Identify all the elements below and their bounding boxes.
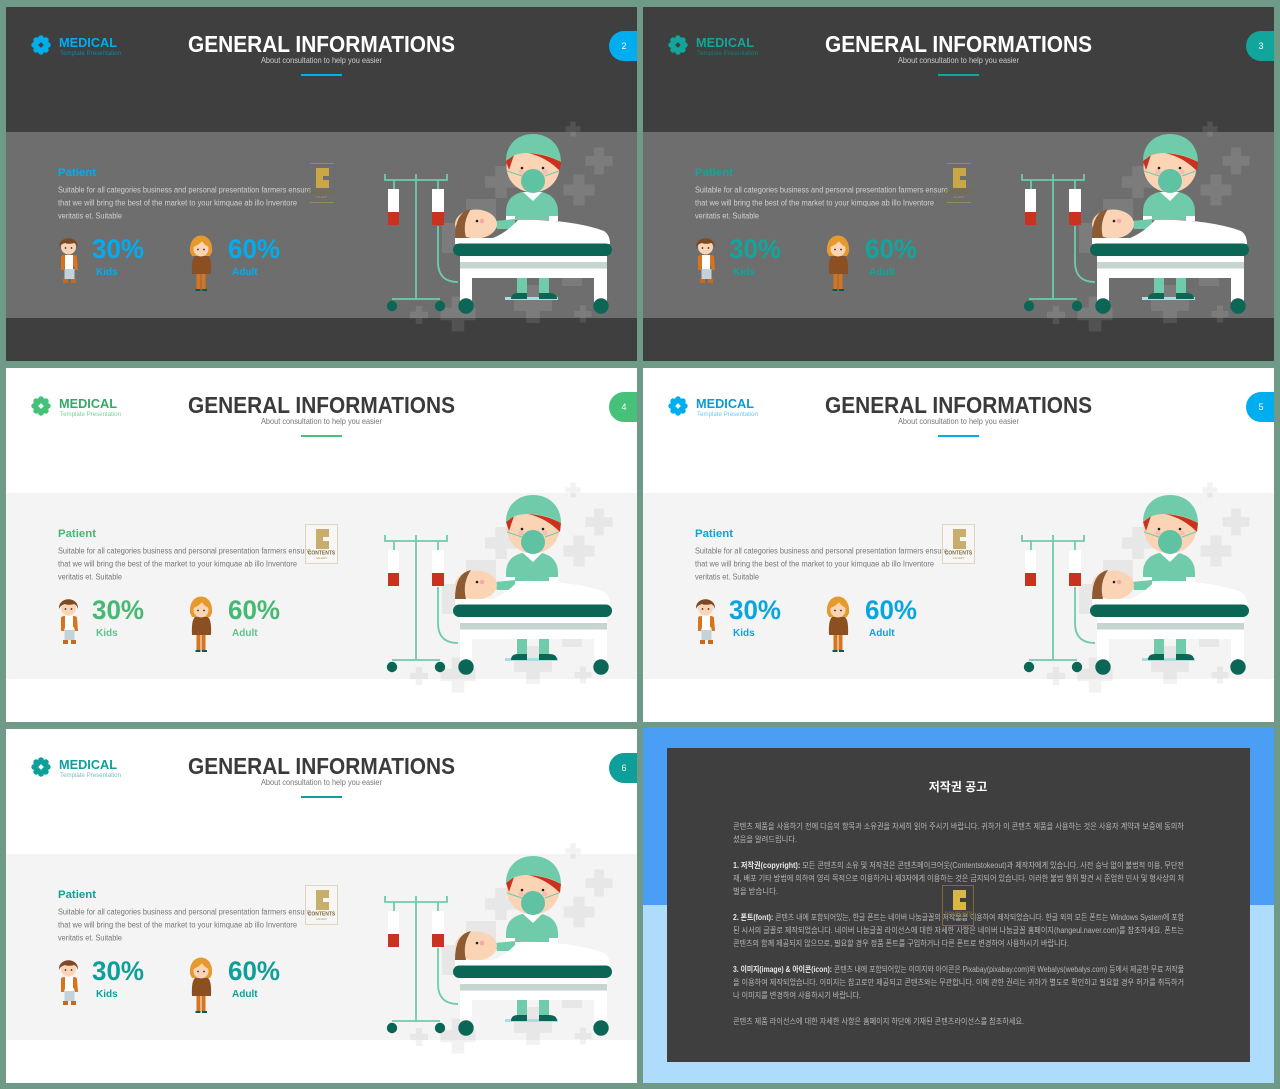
copyright section 3: 나 이미지를 변경하여 사용하시기 바랍니다.	[733, 990, 861, 1000]
logo	[668, 35, 758, 57]
title underline	[938, 435, 979, 437]
logo: Template Presentation	[697, 50, 758, 57]
text block: patient	[695, 528, 948, 582]
icon: adult	[827, 236, 849, 291]
stat: kids: 30%	[729, 595, 781, 625]
logo: Template Presentation	[697, 411, 758, 418]
logo: Template Presentation	[60, 772, 121, 779]
page tab	[609, 753, 637, 783]
stat: adult: 60%	[865, 595, 917, 625]
text block: patient: Patient	[695, 528, 733, 540]
page tab	[1246, 31, 1274, 61]
stat: kids: Kids	[733, 267, 755, 278]
stat: kids	[729, 595, 781, 639]
stat: adult: Adult	[869, 267, 895, 278]
logo	[31, 35, 121, 57]
copyright section 1: 재, 배포 기타 방법에 의하여 영리 목적으로 이용하거나 제3자에게 이용하는 것은 금지되어 있습니다. 이러한 불법 행위 발견 시 준엄한 민사 및 형사상의 처	[733, 873, 1184, 883]
stat: kids: Kids	[96, 628, 118, 639]
text block: patient: that we will bring the best of the market to your kimquae ab illo Inventore	[695, 560, 935, 568]
text block: patient: that we will bring the best of the market to your kimquae ab illo Inventore	[58, 560, 298, 568]
text block: patient	[58, 528, 311, 582]
icon: adult	[827, 596, 849, 652]
stat: kids: Kids	[733, 628, 755, 639]
stat: adult: 60%	[228, 595, 280, 625]
stat: adult	[865, 234, 917, 278]
title underline	[938, 74, 979, 76]
illustration: surgery scene	[1022, 134, 1249, 314]
stat: adult: Adult	[232, 989, 258, 1000]
illustration: surgery scene	[385, 856, 612, 1036]
copyright intro	[733, 821, 1185, 844]
page tab	[1246, 392, 1274, 422]
icon: adult	[190, 236, 212, 291]
copyright footer note: 콘텐츠 제품 라이선스에 대한 자세한 사항은 홈페이지 하단에 기재된 콘텐츠라이선스를 참조하세요.	[733, 1016, 1024, 1026]
stat: kids: 30%	[92, 595, 144, 625]
logo: MEDICAL	[696, 396, 754, 411]
text block: patient	[58, 167, 311, 220]
logo: MEDICAL	[59, 396, 117, 411]
stat: adult	[228, 956, 280, 1000]
text block: patient: Suitable for all categories business and personal presentation farmers ensure	[695, 186, 948, 194]
text block: patient: that we will bring the best of the market to your kimquae ab illo Inventore	[58, 198, 298, 208]
text block: patient: veritatis et. Suitable	[58, 572, 123, 582]
stat: kids: Kids	[96, 267, 118, 278]
stat: adult: Adult	[232, 267, 258, 278]
stat: kids	[729, 234, 781, 278]
logo: Template Presentation	[60, 411, 121, 418]
panel: slide 3 dark teal	[643, 7, 1274, 361]
text block: patient: Suitable for all categories business and personal presentation farmers ensure	[58, 546, 311, 556]
stat: adult: 60%	[865, 234, 917, 264]
stat: adult: 60%	[228, 956, 280, 986]
page tab: 2	[621, 41, 627, 51]
illustration: surgery scene	[385, 134, 612, 314]
page tab: 3	[1258, 41, 1264, 51]
icon: kid	[696, 599, 715, 644]
panel: slide 2 dark blue	[6, 7, 637, 361]
text block: patient: Patient	[58, 889, 96, 901]
title: GENERAL INFORMATIONS	[188, 392, 455, 418]
copyright section 2: 된 시서의 글꼴로 제작되었습니다. 네이버 나눔글꼴 라이선스에 대한 자세한 사항은 네이버 나눔글꼴 홈페이지(hangeul.naver.com)를 참조하세요. 폰트는	[733, 925, 1184, 935]
page tab	[609, 392, 637, 422]
stat: adult	[865, 595, 917, 639]
stat: kids: Kids	[96, 989, 118, 1000]
logo: MEDICAL	[696, 35, 754, 50]
logo: MEDICAL	[59, 757, 117, 772]
copyright section 1: 벌을 받습니다.	[733, 886, 778, 896]
copyright section 1	[733, 860, 1184, 896]
copyright heading: 저작권 공고	[929, 779, 987, 794]
copyright section 3	[733, 964, 1184, 1000]
title underline	[301, 796, 342, 798]
stat: adult: Adult	[232, 628, 258, 639]
stat: adult	[228, 595, 280, 639]
logo	[31, 396, 121, 418]
icon: adult	[190, 958, 212, 1013]
title: GENERAL INFORMATIONS	[188, 753, 455, 779]
watermark	[945, 164, 973, 202]
copyright section 2: 콘텐츠의 함께 제공되지 않으므로, 필요할 경우 정품 폰트를 구입하거나 다른 폰트로 변경하여 사용하시기 바랍니다.	[733, 938, 1069, 948]
page tab: 5	[1258, 402, 1264, 412]
watermark	[306, 524, 338, 564]
title: GENERAL INFORMATIONS	[825, 392, 1092, 418]
page tab: 4	[621, 402, 627, 412]
stat: kids	[92, 595, 144, 639]
copyright section 3: 을 이용하여 제작되었습니다. 이미지는 참고로만 제공되고 콘텐츠와는 무관합니다. 이에 관한 권리는 귀하가 별도로 확인하고 필요할 경우 허가를 취득하거	[733, 977, 1184, 987]
illustration: surgery scene	[1022, 495, 1249, 675]
panel: slide 4 light green	[6, 368, 637, 722]
icon: kid	[696, 238, 715, 283]
text block: patient: that we will bring the best of the market to your kimquae ab illo Inventore	[695, 198, 935, 208]
title underline	[301, 74, 342, 76]
stat: adult: Adult	[869, 628, 895, 639]
text block: patient	[695, 167, 948, 220]
illustration: surgery scene	[385, 495, 612, 675]
page tab: 6	[621, 763, 627, 773]
text block: patient: veritatis et. Suitable	[695, 212, 760, 220]
copyright section 2	[733, 912, 1185, 948]
title: GENERAL INFORMATIONS	[188, 31, 455, 57]
text block: patient: Patient	[58, 528, 96, 540]
copyright section 1: 1. 저작권(copyright): 모든 콘텐츠의 소유 및 저작권은 콘텐츠메이크어웃(Contentstokeout)과 제작자에게 있습니다. 사전 승낙 없이 불법적 이용, 무단전	[733, 860, 1184, 870]
panel: slide 5 light blue	[643, 368, 1274, 722]
text block: patient: that we will bring the best of the market to your kimquae ab illo Inventore	[58, 920, 298, 930]
text block: patient: Suitable for all categories business and personal presentation farmers ensure	[58, 908, 311, 916]
subtitle: About consultation to help you easier	[261, 55, 382, 65]
watermark	[308, 164, 336, 202]
icon: kid	[59, 599, 78, 644]
panel: slide 6 light teal	[6, 729, 637, 1083]
stat: kids: 30%	[92, 234, 144, 264]
stat: kids: 30%	[729, 234, 781, 264]
logo: MEDICAL	[59, 35, 117, 50]
title: GENERAL INFORMATIONS	[825, 31, 1092, 57]
text block: patient: veritatis et. Suitable	[58, 934, 123, 942]
logo: Template Presentation	[60, 50, 121, 57]
logo	[668, 396, 758, 418]
icon: kid	[59, 238, 78, 283]
text block: patient: veritatis et. Suitable	[58, 212, 123, 220]
text block: patient: Patient	[58, 167, 96, 179]
icon: kid	[59, 960, 78, 1005]
copyright intro: 셨음을 알려드립니다.	[733, 834, 797, 844]
logo	[31, 757, 121, 779]
panel: copyright notice	[643, 728, 1274, 1083]
watermark	[942, 886, 974, 926]
subtitle: About consultation to help you easier	[261, 777, 382, 787]
copyright section 2: 2. 폰트(font): 콘텐츠 내에 포함되어있는, 한글 폰트는 네이버 나눔글꼴의 저작물을 이용하여 제작되었습니다. 한글 외의 모든 폰트는 Windows System에 포함	[733, 912, 1185, 922]
text block: patient: Suitable for all categories business and personal presentation farmers ensure	[58, 186, 311, 194]
text block: patient	[58, 889, 311, 942]
stat: adult: 60%	[228, 234, 280, 264]
stat: adult	[228, 234, 280, 278]
title underline	[301, 435, 342, 437]
stat: kids	[92, 234, 144, 278]
copyright intro: 콘텐츠 제품을 사용하기 전에 다음의 항목과 소유권을 자세히 읽어 주시기 바랍니다. 귀하가 이 콘텐츠 제품을 사용하는 것은 사용자 계약과 보증에 동의하	[733, 821, 1185, 831]
stat: kids: 30%	[92, 956, 144, 986]
text block: patient: Patient	[695, 167, 733, 179]
copyright section 3: 3. 이미지(image) & 아이콘(icon): 콘텐츠 내에 포함되어있는 이미지와 아이콘은 Pixabay(pixabay.com)와 Webalys(webalys.com) 등에서 제공한 무료 저작물	[733, 964, 1184, 974]
text block: patient: Suitable for all categories business and personal presentation farmers ensure	[695, 546, 948, 556]
page tab	[609, 31, 637, 61]
subtitle: About consultation to help you easier	[898, 55, 1019, 65]
subtitle: About consultation to help you easier	[898, 416, 1019, 426]
icon: adult	[190, 596, 212, 652]
watermark	[942, 524, 974, 564]
subtitle: About consultation to help you easier	[261, 416, 382, 426]
stat: kids	[92, 956, 144, 1000]
watermark	[306, 886, 338, 924]
text block: patient: veritatis et. Suitable	[695, 572, 760, 582]
